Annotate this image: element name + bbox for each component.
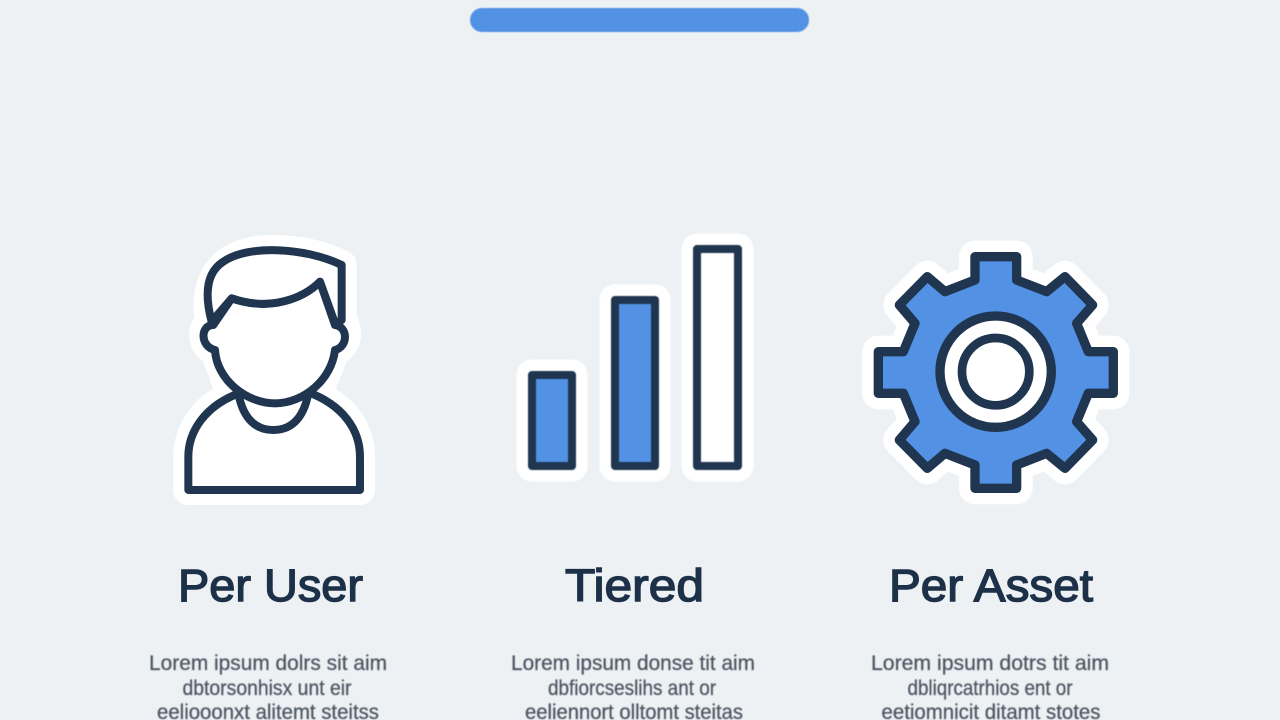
icon: bar chart [532, 249, 738, 466]
person hair [208, 250, 342, 323]
heading: Per Asset: Per Asset [889, 560, 1094, 611]
text block: Tiered description: Lorem ipsum donse tit aim [511, 652, 755, 675]
top accent bar [470, 8, 809, 32]
person halo [188, 250, 360, 490]
heading: Per User: Per User [178, 560, 363, 611]
text block: Per Asset description [871, 652, 1109, 720]
text block: Per User description [149, 652, 387, 720]
icon: gear [878, 257, 1113, 488]
text block: Tiered description: dbfiorcseslihs ant or [548, 677, 716, 700]
person head and ears [204, 282, 345, 403]
person shoulders [188, 392, 360, 490]
text block: Per User description: Lorem ipsum dolrs sit aim [149, 652, 387, 675]
text block: Tiered description [511, 652, 755, 720]
person collar [238, 393, 308, 430]
text block: Per User description: dbtorsonhisx unt eir [182, 677, 352, 700]
text block: Per Asset description: dbliqrcatrhios ent or [908, 677, 1072, 700]
heading: Tiered: Tiered [565, 560, 704, 611]
icon: person [188, 250, 360, 490]
text block: Per Asset description: Lorem ipsum dotrs tit aim [871, 652, 1109, 675]
